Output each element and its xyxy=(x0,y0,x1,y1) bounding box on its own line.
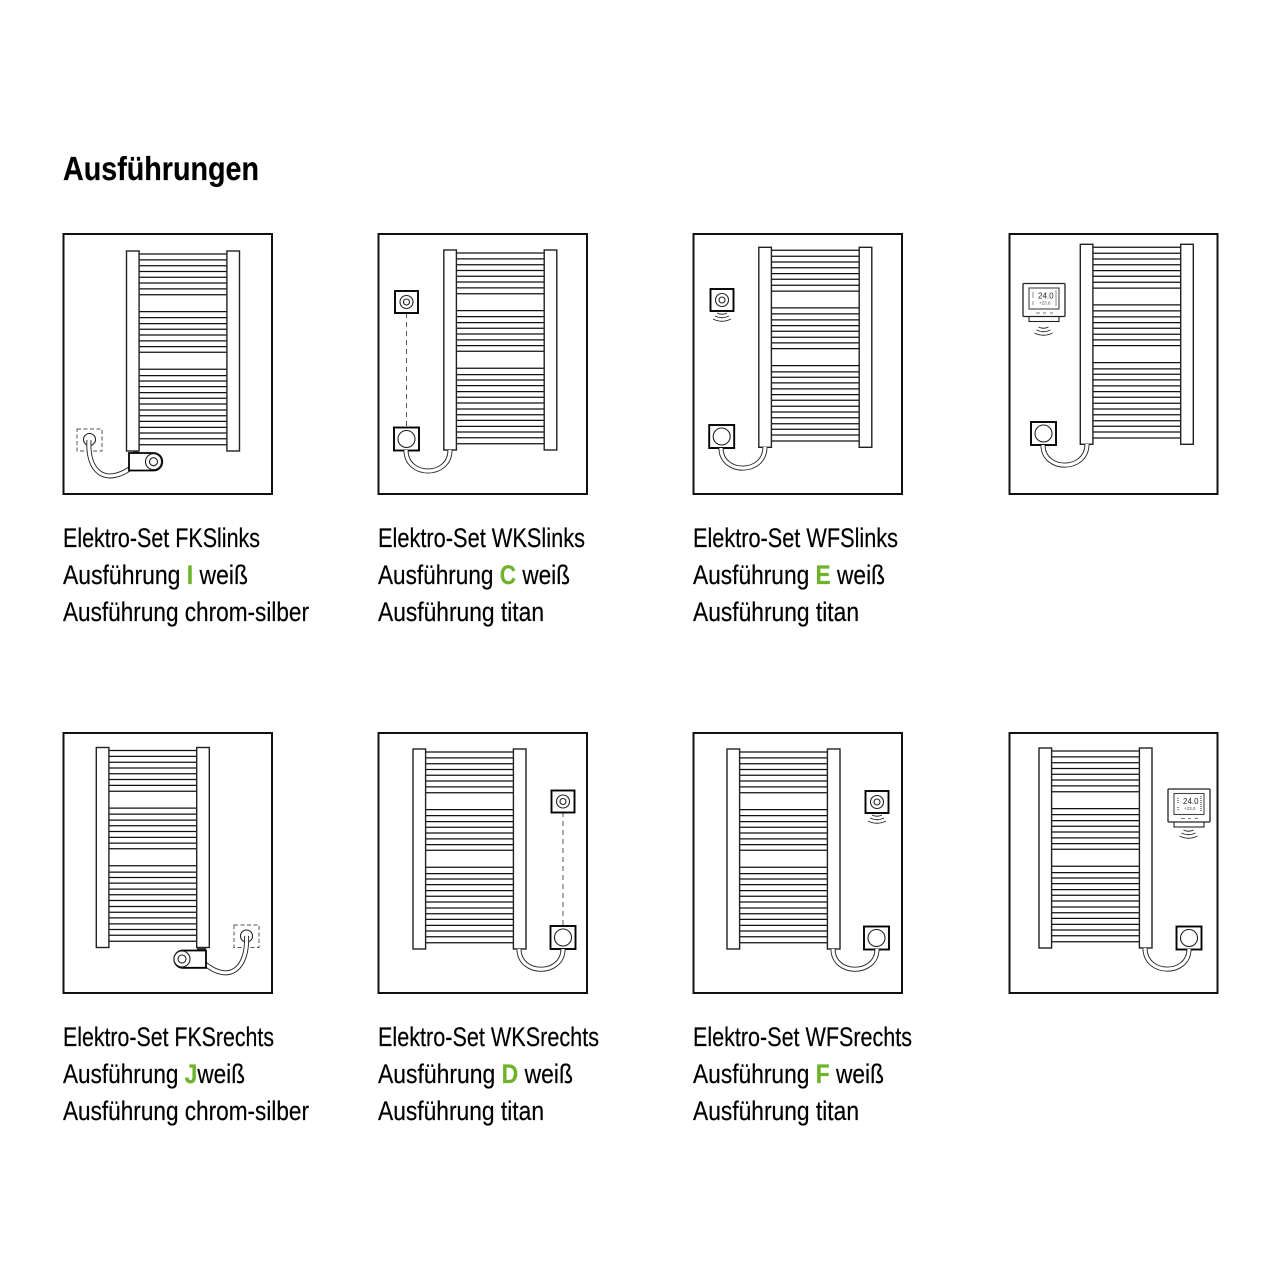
label: Elektro-Set FKS links: Ausführung chrom-silber xyxy=(63,597,309,627)
label: Elektro-Set WKS links xyxy=(378,523,585,627)
title: Ausführungen xyxy=(63,150,259,187)
icon: towel radiator xyxy=(96,748,209,948)
icon: wireless thermostat xyxy=(710,289,734,321)
label: Elektro-Set WFS links: Ausführung titan xyxy=(693,597,859,627)
label: Elektro-Set WFS rechts: Ausführung titan xyxy=(693,1096,859,1126)
panel: Elektro-Set FKS rechts xyxy=(64,733,272,993)
icon: socket xyxy=(394,428,419,450)
label: Elektro-Set FKS links: Elektro-Set FKSlinks xyxy=(63,523,260,553)
panel: display thermostat right xyxy=(1010,733,1218,993)
icon: towel radiator xyxy=(126,251,240,451)
panel: Elektro-Set WFS rechts xyxy=(694,733,902,993)
icon: heating element xyxy=(129,450,162,470)
icon: socket xyxy=(1031,422,1056,445)
icon: power cable xyxy=(721,447,765,468)
icon: towel radiator xyxy=(444,250,557,450)
label: Elektro-Set FKS rechts: Ausführung Jweiß xyxy=(63,1059,245,1089)
label: Elektro-Set FKS rechts xyxy=(63,1022,309,1126)
icon: wireless thermostat xyxy=(866,791,888,823)
icon: towel radiator xyxy=(1080,244,1193,444)
label: Elektro-Set WKS links: Ausführung titan xyxy=(378,597,544,627)
icon: socket xyxy=(709,425,734,448)
icon: towel radiator xyxy=(1039,748,1152,948)
panel: display thermostat left xyxy=(1010,234,1218,494)
label: Elektro-Set WFS rechts xyxy=(693,1022,912,1126)
icon: socket xyxy=(550,926,576,949)
panel: Elektro-Set FKS links xyxy=(64,234,272,494)
icon: power cable xyxy=(89,440,131,476)
icon: socket xyxy=(1176,926,1202,950)
icon: power cable xyxy=(833,949,877,969)
label: Elektro-Set WKS links: Ausführung C weiß xyxy=(378,560,570,590)
label: Elektro-Set WFS links xyxy=(693,523,898,627)
icon: towel radiator xyxy=(759,247,872,447)
label: Elektro-Set WFS links: Ausführung E weiß xyxy=(693,560,885,590)
icon: wired thermostat xyxy=(395,291,418,427)
label: Elektro-Set WFS rechts: Elektro-Set WFSrechts xyxy=(693,1022,912,1052)
icon: towel radiator xyxy=(413,749,526,949)
label: Elektro-Set WKS rechts xyxy=(378,1022,599,1126)
icon: display thermostat xyxy=(1168,789,1210,838)
label: Elektro-Set WFS rechts: Ausführung F weiß xyxy=(693,1059,884,1089)
icon: power cable xyxy=(519,949,563,969)
label: Elektro-Set FKS rechts: Elektro-Set FKSrechts xyxy=(63,1022,274,1052)
icon: heating element xyxy=(174,948,206,968)
label: Elektro-Set WKS rechts: Ausführung D weiß xyxy=(378,1059,573,1089)
panel: Elektro-Set WKS links xyxy=(378,234,587,494)
label: Elektro-Set FKS links: Ausführung I weiß xyxy=(63,560,248,590)
label: Elektro-Set FKS links xyxy=(63,523,309,627)
label: Elektro-Set WKS rechts: Ausführung titan xyxy=(378,1096,544,1126)
panel: Elektro-Set WKS rechts xyxy=(378,733,587,993)
label: Elektro-Set WKS rechts: Elektro-Set WKSrechts xyxy=(378,1022,599,1052)
icon: power cable xyxy=(205,936,247,973)
icon: power cable xyxy=(406,450,450,471)
icon: towel radiator xyxy=(727,749,840,949)
label: Elektro-Set FKS rechts: Ausführung chrom-silber xyxy=(63,1096,309,1126)
icon: power cable xyxy=(1145,948,1189,969)
icon: dashed wall socket xyxy=(234,925,259,948)
label: Elektro-Set WKS links: Elektro-Set WKSlinks xyxy=(378,523,585,553)
icon: wired thermostat xyxy=(552,790,574,926)
icon: display thermostat xyxy=(1023,284,1065,335)
icon: power cable xyxy=(1043,444,1087,465)
icon: socket xyxy=(864,926,889,950)
label: Elektro-Set WFS links: Elektro-Set WFSlinks xyxy=(693,523,898,553)
panel: Elektro-Set WFS links xyxy=(694,234,902,494)
icon: dashed wall socket xyxy=(77,429,102,451)
